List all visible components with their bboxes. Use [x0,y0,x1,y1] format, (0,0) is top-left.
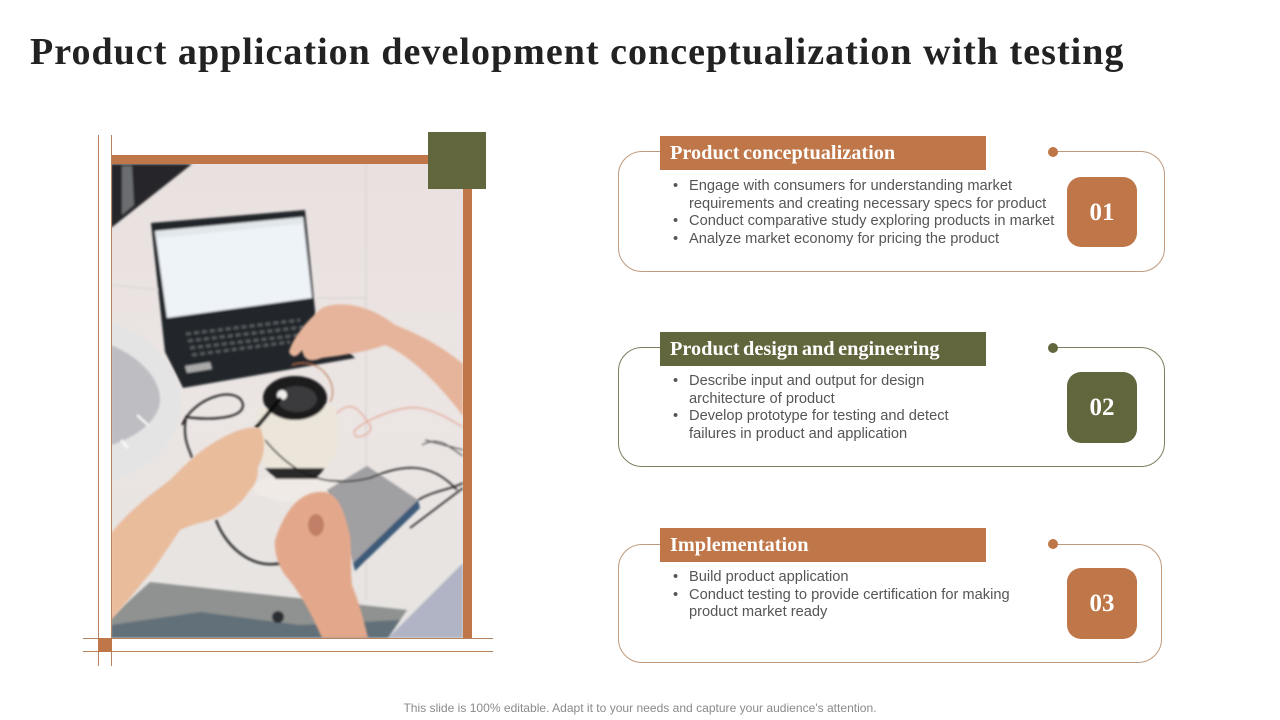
number badge: 03 [1090,590,1114,617]
heading band: Product design and engineering [670,338,940,360]
frame guide line: bottom upper [83,638,493,639]
bullet text: Conduct comparative study exploring products in market [689,213,1054,229]
sleeve [388,563,463,638]
bullet text [673,178,1054,247]
heading band [660,136,986,170]
bullet text: Engage with consumers for understanding market [689,178,1012,194]
device [252,474,340,502]
upper arm and fingers [289,304,463,416]
bullet text: Conduct testing to provide certification for making [689,587,1010,603]
olive corner square [428,132,486,189]
panel: step 01 [618,136,1165,272]
frame guide line: bottom lower [83,651,493,652]
copper corner square [98,638,112,652]
bullet text [673,373,949,442]
bullet text: • [673,178,678,194]
heading band: Product conceptualization [670,142,895,164]
white bowl [111,322,181,481]
frame bar: right [463,164,472,638]
number badge [1067,177,1137,247]
card border gap [983,541,1053,547]
bullet text [673,569,1010,620]
heading band [660,528,986,562]
panel: photo with frame [83,132,493,666]
card outline [618,151,1165,272]
heading band: Implementation [670,534,809,556]
card border gap [983,148,1053,154]
number badge: 02 [1090,394,1114,421]
bullet text: • [673,408,678,424]
wires [182,395,243,458]
frame guide line: left outer [98,135,99,666]
card outline [618,544,1162,663]
number badge [1067,372,1137,443]
bullet text: • [673,587,678,603]
bullet text: requirements and creating necessary specs for product [689,196,1046,212]
bullet text: • [673,373,678,389]
laptop [151,210,355,388]
connector dot [1048,539,1058,549]
bullet text: Analyze market economy for pricing the product [689,231,999,247]
bullet text: product market ready [689,604,827,620]
table edge [111,582,407,638]
bullet text: Describe input and output for design [689,373,924,389]
number badge: 01 [1090,199,1114,226]
bullet text: failures in product and application [689,426,907,442]
frame guide line: left inner [111,135,112,666]
title: Product application development conceptualization with testing [30,31,1124,73]
connector dot [1048,343,1058,353]
grey box [327,466,418,563]
photo: hands testing a device beside a laptop [112,164,463,638]
panel: step 03 [618,528,1162,663]
number badge [1067,568,1137,639]
bullet text: • [673,569,678,585]
frame bar: top [111,155,456,164]
footer note: This slide is 100% editable. Adapt it to your needs and capture your audience's attention. [403,701,877,715]
connector dot [1048,147,1058,157]
bullet text: Build product application [689,569,849,585]
card outline [618,347,1165,467]
bullet text: • [673,231,678,247]
left arm and hand [111,427,264,620]
bullet text: • [673,213,678,229]
bullet text: Develop prototype for testing and detect [689,408,949,424]
front hand and arm [275,492,368,638]
panel: step 02 [618,332,1165,467]
card border gap [983,344,1053,350]
heading band [660,332,986,366]
bullet text: architecture of product [689,391,835,407]
